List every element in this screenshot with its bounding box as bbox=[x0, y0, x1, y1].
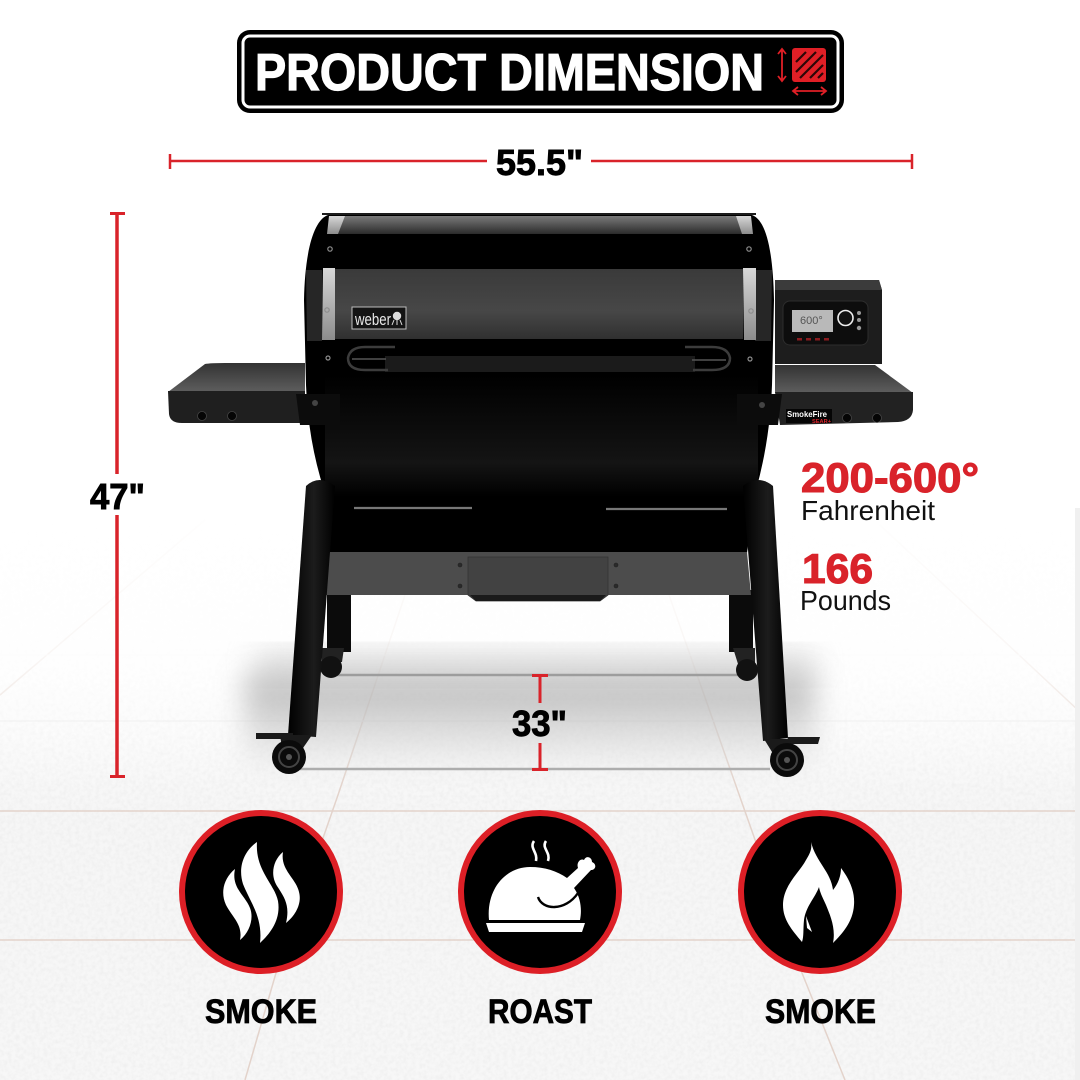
dimension: width 55.5 inches bbox=[170, 142, 912, 183]
under-body trim lines bbox=[354, 508, 727, 509]
feature: sear flame: SMOKE bbox=[765, 993, 876, 1031]
Weber logo plate: weber bbox=[354, 310, 391, 329]
spec: temperature bbox=[801, 454, 979, 526]
lid handle bbox=[348, 347, 730, 372]
front left caster bbox=[256, 733, 312, 774]
spec: temperature: 200-600° bbox=[801, 454, 979, 501]
lid metal bands bbox=[322, 216, 756, 340]
SmokeFire label bbox=[786, 409, 832, 425]
grill product illustration bbox=[168, 214, 913, 777]
spec: weight: 166 bbox=[802, 545, 873, 592]
title badge bbox=[237, 30, 844, 113]
spec: temperature: Fahrenheit bbox=[801, 495, 935, 526]
lower cross panel bbox=[325, 552, 751, 601]
grill body and lid bbox=[296, 214, 782, 553]
dimension: depth 33 inches: 33" bbox=[512, 703, 567, 744]
feature: roast: ROAST bbox=[488, 993, 592, 1031]
lid side brackets bbox=[296, 394, 782, 425]
icon: dimension square with arrows bbox=[778, 48, 826, 95]
feature: sear flame bbox=[741, 813, 899, 1031]
back legs and casters bbox=[320, 590, 758, 681]
feature: smoke: SMOKE bbox=[205, 993, 317, 1031]
dimension: width 55.5 inches: 55.5" bbox=[496, 142, 583, 183]
floor shadow under grill bbox=[245, 652, 815, 769]
right side shelf bbox=[775, 365, 913, 425]
dimension: height 47 inches: 47" bbox=[90, 476, 145, 517]
control box bbox=[775, 280, 882, 364]
front legs bbox=[288, 480, 788, 741]
feature: smoke bbox=[182, 813, 340, 1031]
feature: roast bbox=[461, 813, 619, 1031]
SmokeFire label: SmokeFire bbox=[787, 409, 827, 419]
front right caster bbox=[764, 737, 820, 777]
dimension: height 47 inches bbox=[90, 213, 145, 777]
display screen: 600° bbox=[800, 315, 823, 327]
SmokeFire label: SEAR+ bbox=[812, 419, 831, 425]
spec: weight bbox=[800, 545, 891, 616]
icon: roast turkey bbox=[486, 841, 595, 932]
spec: weight: Pounds bbox=[800, 585, 891, 616]
left side shelf bbox=[168, 363, 305, 423]
icon: flame bbox=[783, 842, 854, 943]
dimension: depth 33 inches bbox=[512, 675, 567, 770]
title text: PRODUCT DIMENSION bbox=[255, 44, 764, 102]
icon: smoke waves bbox=[223, 842, 300, 943]
